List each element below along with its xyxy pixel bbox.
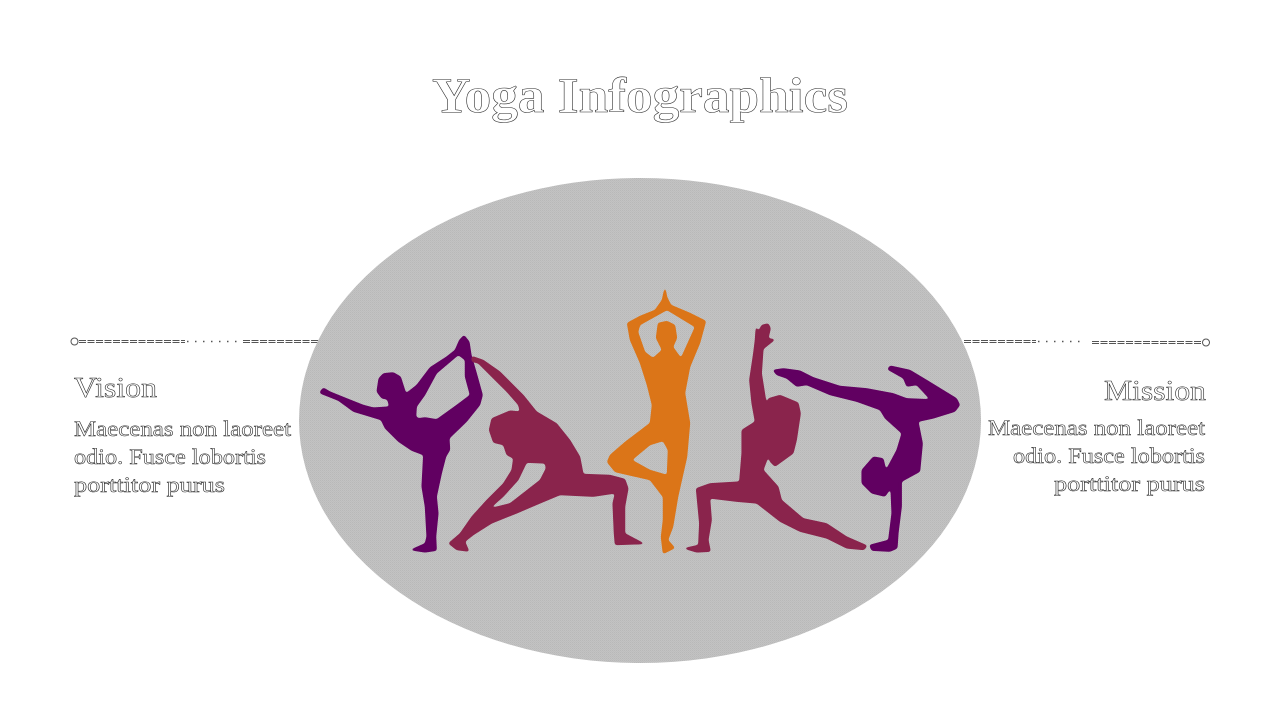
text block: vision: Maecenas non laoreet <box>74 416 291 441</box>
text block: mission: odio. Fusce lobortis <box>1013 443 1205 468</box>
heading: vision: Vision <box>74 373 157 404</box>
figure: handstand pose, purple <box>773 366 960 552</box>
figure: tree pose, orange <box>607 286 706 554</box>
grey ellipse backdrop <box>299 178 981 663</box>
figure: dancer pose, purple <box>320 335 483 552</box>
text block: mission <box>988 415 1205 496</box>
title: Yoga Infographics <box>432 67 848 123</box>
figure: side stretch pose, maroon <box>448 356 645 552</box>
text block: mission: Maecenas non laoreet <box>988 415 1205 440</box>
connector line: vision <box>71 338 320 345</box>
text block: vision: porttitor purus <box>74 472 225 497</box>
text block: mission: porttitor purus <box>1054 471 1205 496</box>
text block: vision <box>74 416 291 497</box>
text block: vision: odio. Fusce lobortis <box>74 444 266 469</box>
heading: mission: Mission <box>1104 376 1206 407</box>
connector line: mission <box>964 339 1210 346</box>
figure: warrior pose, maroon <box>683 323 867 552</box>
